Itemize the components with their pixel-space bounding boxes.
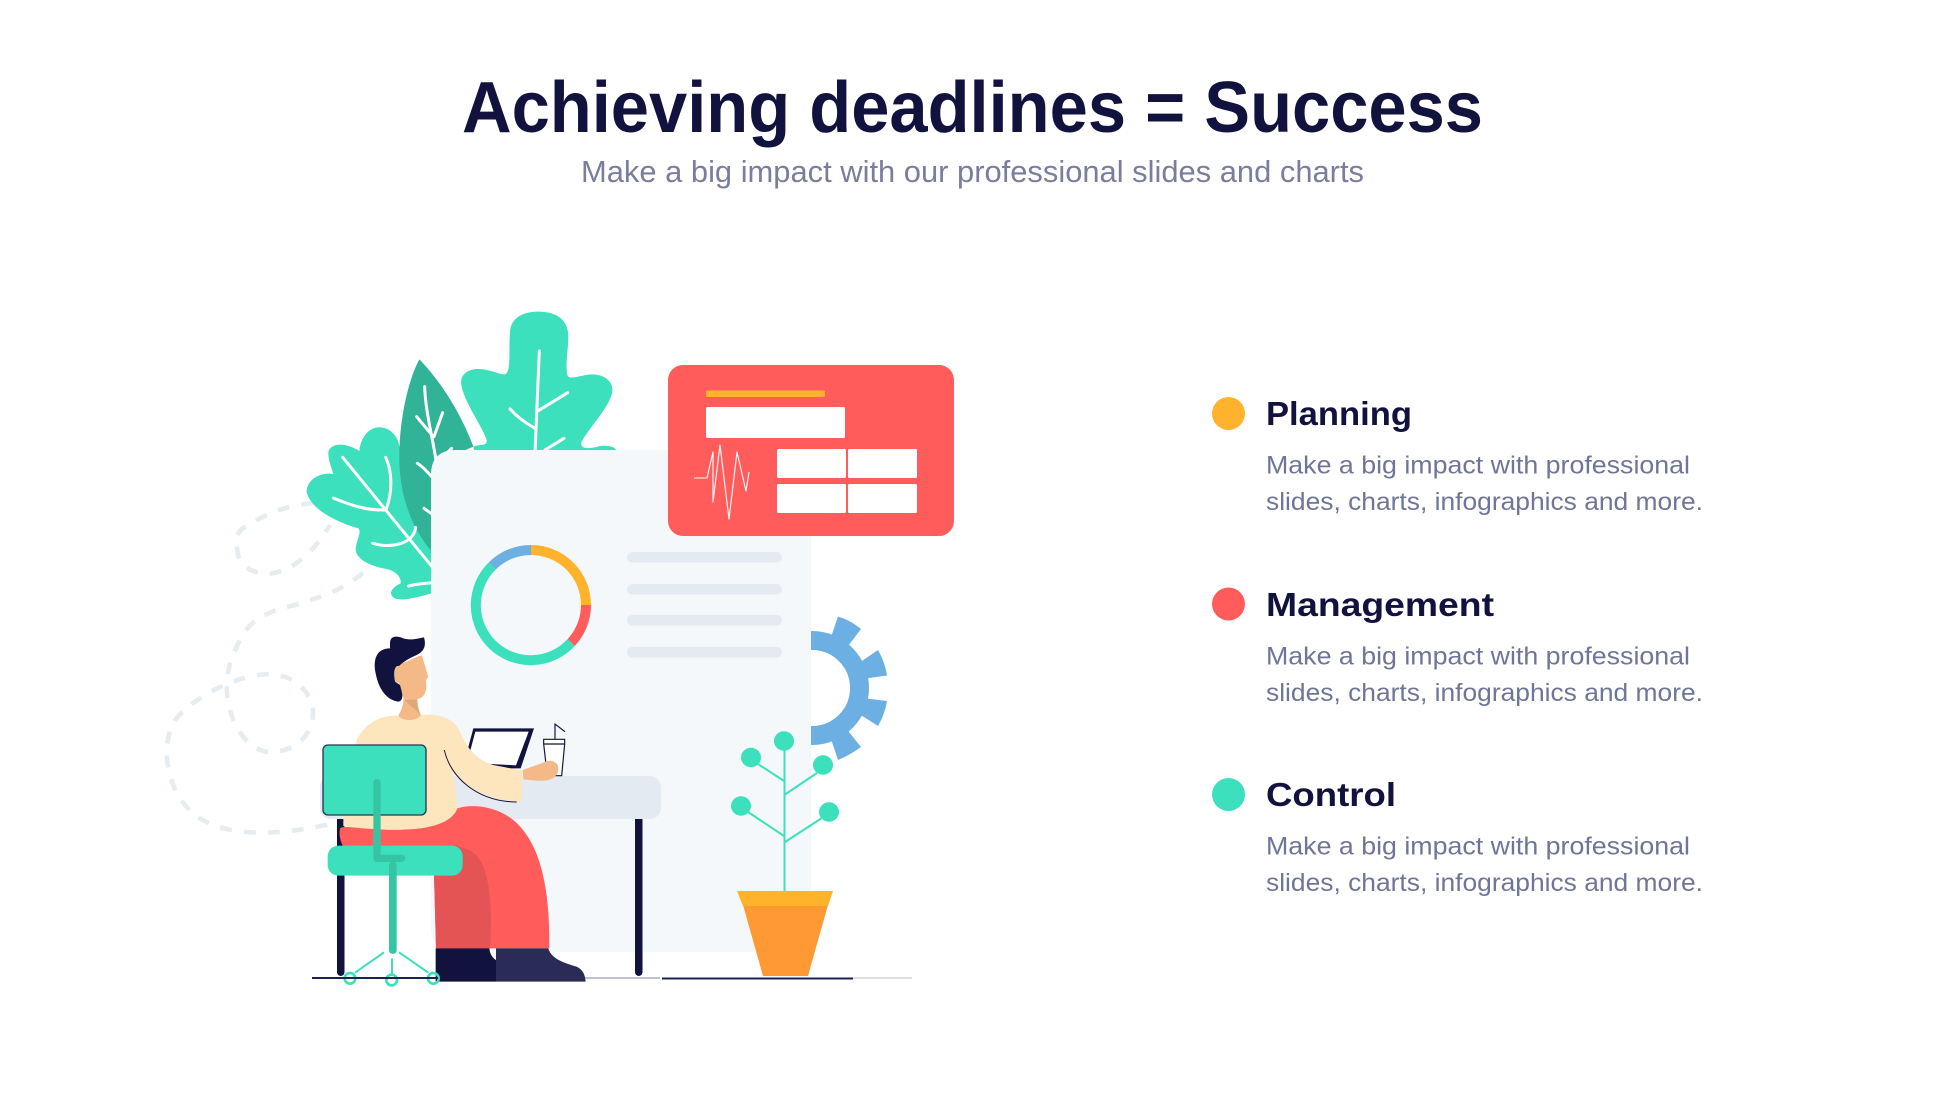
illustration — [167, 312, 954, 985]
pulse line — [694, 445, 749, 519]
hair — [375, 637, 425, 702]
flower pot — [737, 891, 833, 976]
red dashboard card — [668, 365, 954, 536]
trouser shade — [434, 846, 491, 948]
chair support — [377, 783, 402, 858]
leaf: right — [461, 312, 617, 463]
arm outline — [444, 750, 517, 802]
face — [395, 655, 428, 700]
document panel — [431, 450, 811, 952]
dashed trails — [167, 503, 363, 833]
shoe: back — [436, 948, 496, 982]
desk — [320, 776, 661, 976]
text: management line 2: slides, charts, infographics and more. — [1266, 679, 1703, 707]
neck shade — [405, 699, 420, 714]
office chair — [323, 745, 463, 985]
text: control line 1: Make a big impact with professional — [1266, 832, 1690, 860]
chair seat — [328, 846, 463, 876]
dot: planning — [1212, 397, 1245, 430]
chair feet — [355, 952, 428, 974]
chair back — [323, 745, 426, 815]
document text lines — [627, 552, 782, 658]
dot: control — [1212, 778, 1245, 811]
shoe: front — [496, 948, 586, 982]
chair wheels — [345, 973, 439, 985]
drinking glass — [544, 724, 565, 776]
text: planning line 1: Make a big impact with professional — [1266, 452, 1690, 480]
heading: management: Management — [1266, 586, 1494, 623]
ground line — [312, 977, 912, 980]
text: management line 1: Make a big impact with professional — [1266, 642, 1690, 670]
person — [340, 637, 586, 982]
heading: control: Control — [1266, 776, 1396, 813]
subtitle: Make a big impact with our professional slides and charts — [581, 154, 1364, 189]
title: Achieving deadlines = Success — [462, 68, 1483, 148]
leaf: left — [307, 427, 443, 599]
icon: gear — [764, 616, 887, 760]
hand — [523, 761, 558, 781]
donut chart — [476, 550, 586, 660]
text: control line 2: slides, charts, infographics and more. — [1266, 869, 1703, 897]
leaf: dark centre — [333, 359, 473, 586]
heading: planning: Planning — [1266, 395, 1412, 432]
tablet — [467, 728, 534, 768]
legend: planning — [1212, 395, 1703, 516]
chair stem — [389, 862, 397, 954]
neck — [398, 695, 421, 720]
sweater — [343, 715, 522, 829]
text: planning line 2: slides, charts, infographics and more. — [1266, 488, 1703, 516]
legend: control — [1212, 776, 1703, 897]
legend: management — [1212, 586, 1703, 707]
dot: management — [1212, 588, 1245, 620]
plant — [731, 731, 839, 891]
trousers — [340, 806, 549, 948]
